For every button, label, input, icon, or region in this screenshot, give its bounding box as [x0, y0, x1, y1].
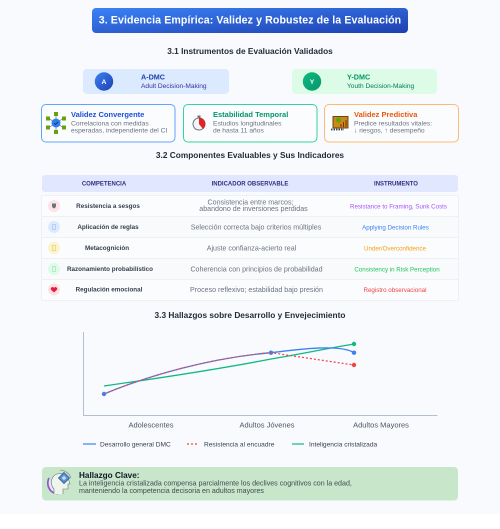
heading: 3.2: 3.2 Componentes Evaluables y Sus Indicadores	[156, 150, 344, 160]
row: regulacion emocional: Registro observacional	[364, 287, 426, 294]
icon: head with gear	[48, 470, 71, 494]
instrument: Y-DMC: Youth Decision-Making	[347, 83, 415, 90]
card: estabilidad temporal: Estabilidad Temporal	[213, 110, 288, 119]
instrument: Y-DMC	[292, 69, 437, 94]
legend: Resistencia al encuadre	[204, 441, 275, 448]
row: aplicacion de reglas: Selección correcta bajo criterios múltiples	[191, 224, 322, 232]
table header: COMPETENCIA	[82, 182, 127, 188]
row: resistencia a sesgos: Consistencia entre marcos;	[208, 198, 294, 206]
series: inteligencia cristalizada	[104, 342, 356, 386]
card: validez convergente	[42, 104, 175, 142]
callout: hallazgo clave: Hallazgo Clave:	[79, 471, 140, 480]
instrument: Y-DMC: Y	[310, 79, 315, 86]
row: razonamiento probabilistico: Consistency in Risk Perception	[354, 266, 440, 273]
table	[42, 175, 458, 300]
row: regulacion emocional: Proceso reflexivo; estabilidad bajo presión	[190, 286, 323, 294]
series: resistencia al encuadre	[104, 353, 356, 394]
title: 3. Evidencia Empírica: Validez y Robustez de la Evaluación	[99, 14, 401, 26]
x axis labels: Adultos Jóvenes	[239, 420, 295, 430]
row: resistencia a sesgos: Resistencia a sesgos	[76, 203, 140, 210]
card: validez predictiva: Validez Predictiva	[354, 110, 418, 119]
callout: hallazgo clave	[42, 467, 458, 500]
icon: network	[46, 112, 66, 134]
card: validez convergente: esperadas, independiente del CI	[71, 128, 167, 135]
table header	[42, 175, 458, 192]
legend: Inteligencia cristalizada	[309, 441, 378, 448]
instrument: Y-DMC: Y-DMC	[347, 72, 370, 82]
row: resistencia a sesgos: Resistance to Framing, Sunk Costs	[350, 203, 447, 210]
row: metacognicion	[48, 242, 427, 254]
row: metacognicion: Under/Overconfidence	[364, 245, 427, 252]
x axis labels: Adultos Mayores	[353, 420, 409, 430]
row: aplicacion de reglas: Applying Decision Rules	[362, 224, 429, 231]
row: resistencia a sesgos	[48, 198, 447, 213]
title	[92, 8, 408, 33]
x axis labels	[128, 420, 409, 430]
heading: 3.1: 3.1 Instrumentos de Evaluación Validados	[167, 46, 333, 56]
legend	[83, 441, 378, 448]
row: resistencia a sesgos: abandono de inversiones perdidas	[199, 205, 308, 213]
row: razonamiento probabilistico	[48, 263, 440, 275]
row: metacognicion: Ajuste confianza-acierto real	[207, 244, 297, 252]
card: validez predictiva: Predice resultados vitales:	[354, 120, 432, 127]
callout: hallazgo clave: La inteligencia cristalizada compensa parcialmente los declives cognitivos con la edad,	[79, 480, 352, 488]
instrument: A-DMC	[83, 69, 229, 94]
instrument: A-DMC: A-DMC	[141, 72, 165, 82]
series: desarrollo general DMC	[102, 348, 356, 396]
row: regulacion emocional	[48, 284, 426, 296]
icon: chart	[331, 116, 348, 130]
table header: INSTRUMENTO	[374, 182, 418, 188]
instrument: A-DMC: Adult Decision-Making	[141, 83, 207, 90]
card: estabilidad temporal: de hasta 11 años	[213, 128, 264, 135]
card: validez predictiva: ↓ riesgos, ↑ desempeño	[354, 128, 425, 135]
row: razonamiento probabilistico: Razonamiento probabilístico	[67, 266, 153, 273]
card: validez convergente: Validez Convergente	[71, 110, 144, 119]
card: estabilidad temporal	[184, 104, 317, 142]
callout: hallazgo clave: manteniendo la competencia decisoria en adultos mayores	[79, 487, 264, 495]
line chart	[84, 332, 438, 430]
row: aplicacion de reglas	[48, 221, 429, 233]
x axis labels: Adolescentes	[128, 420, 174, 430]
heading: 3.3: 3.3 Hallazgos sobre Desarrollo y Envejecimiento	[155, 310, 345, 320]
instrument: A-DMC: A	[102, 79, 107, 86]
row: metacognicion: Metacognición	[85, 245, 129, 252]
table header: INDICADOR OBSERVABLE	[212, 182, 288, 188]
card: estabilidad temporal: Estudios longitudinales	[213, 120, 282, 127]
row: regulacion emocional: Regulación emocional	[76, 287, 143, 294]
icon: stopwatch	[193, 116, 205, 130]
card: validez predictiva	[324, 104, 458, 142]
card: validez convergente: Correlaciona con medidas	[71, 120, 149, 127]
row: razonamiento probabilistico: Coherencia con principios de probabilidad	[190, 266, 323, 274]
legend: Desarrollo general DMC	[100, 441, 171, 448]
row: aplicacion de reglas: Aplicación de reglas	[77, 224, 139, 231]
